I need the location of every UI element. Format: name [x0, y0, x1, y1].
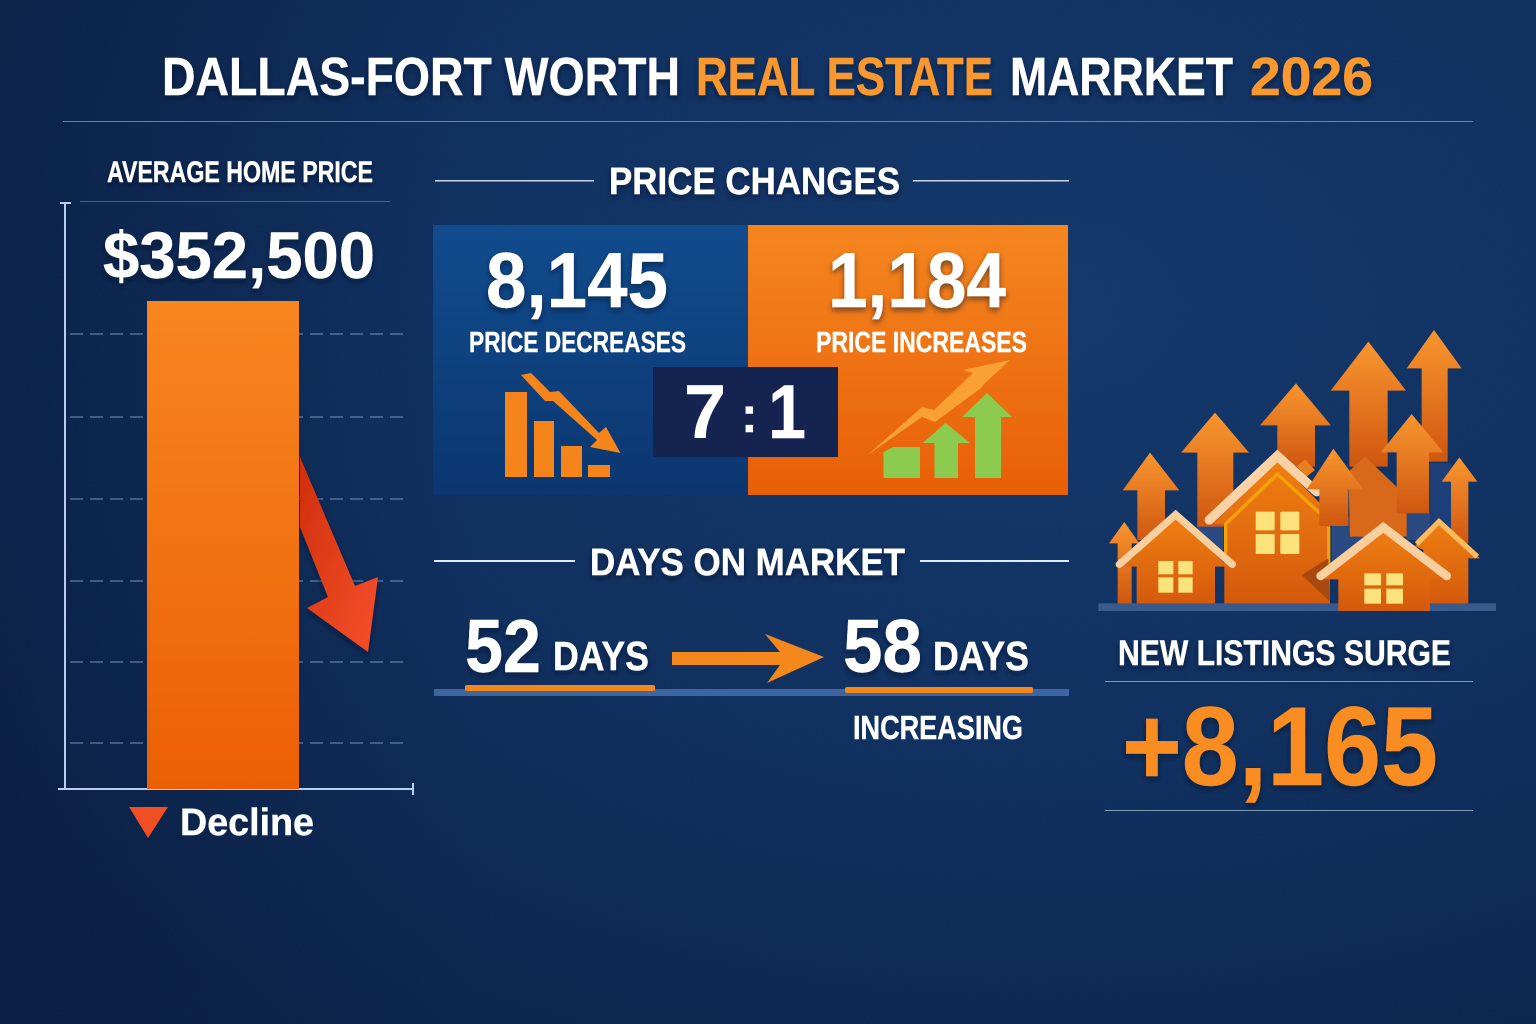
house: back right [1415, 520, 1480, 603]
heading: average home price: AVERAGE HOME PRICE [107, 156, 373, 189]
value: +8,165: +8,165 [1122, 684, 1438, 809]
callout: 7 to 1 ratio [653, 367, 838, 457]
illustration: houses and rising arrows [1098, 330, 1496, 611]
panel: average home price [58, 156, 413, 844]
icon: decline triangle [129, 807, 168, 838]
title: 2026 [1250, 47, 1373, 107]
panel: price increases [748, 225, 1068, 495]
panel: price changes [433, 225, 1068, 495]
callout: 7 to 1 ratio: : [741, 387, 758, 443]
heading: price changes: PRICE CHANGES [609, 161, 900, 203]
house: front right [1321, 527, 1447, 611]
value: 1,184: 1,184 [828, 236, 1006, 324]
panel: days on market [434, 604, 1069, 746]
icon: rising arrows [868, 360, 1012, 478]
panel: new listings surge [1105, 634, 1473, 811]
title: DALLAS-FORT WORTH [162, 47, 680, 107]
icon: falling bars [505, 373, 620, 477]
title: MARRKET [1010, 47, 1233, 107]
label: decline: Decline [180, 802, 314, 844]
heading: days on market: DAYS ON MARKET [590, 542, 905, 584]
title: REAL ESTATE [696, 47, 993, 107]
callout: 7 to 1 ratio: 7 [684, 370, 726, 455]
title [162, 47, 1373, 107]
value: 58 days: 58 [843, 604, 922, 688]
label: increasing: INCREASING [853, 709, 1023, 746]
arrow: front [1307, 449, 1363, 526]
house: left [1119, 515, 1232, 603]
label: price decreases: PRICE DECREASES [469, 327, 686, 359]
callout: 7 to 1 ratio: 1 [768, 370, 806, 455]
arrow: 52 to 58 days [672, 634, 824, 683]
heading: new listings surge: NEW LISTINGS SURGE [1118, 634, 1451, 673]
label: price increases: PRICE INCREASES [816, 327, 1027, 359]
value: 52 days [465, 604, 649, 688]
icon: red decline arrow [300, 457, 378, 652]
value: 58 days: DAYS [933, 633, 1029, 679]
panel: price decreases [433, 225, 748, 495]
value: $352,500: $352,500 [103, 218, 375, 292]
house: main [1209, 456, 1330, 603]
value: 52 days: DAYS [553, 633, 649, 679]
bar [147, 301, 299, 789]
chart: bar with decline arrow [58, 203, 413, 795]
value: 52 days: 52 [465, 604, 541, 688]
value: 58 days [843, 604, 1029, 688]
value: 8,145: 8,145 [486, 236, 668, 324]
